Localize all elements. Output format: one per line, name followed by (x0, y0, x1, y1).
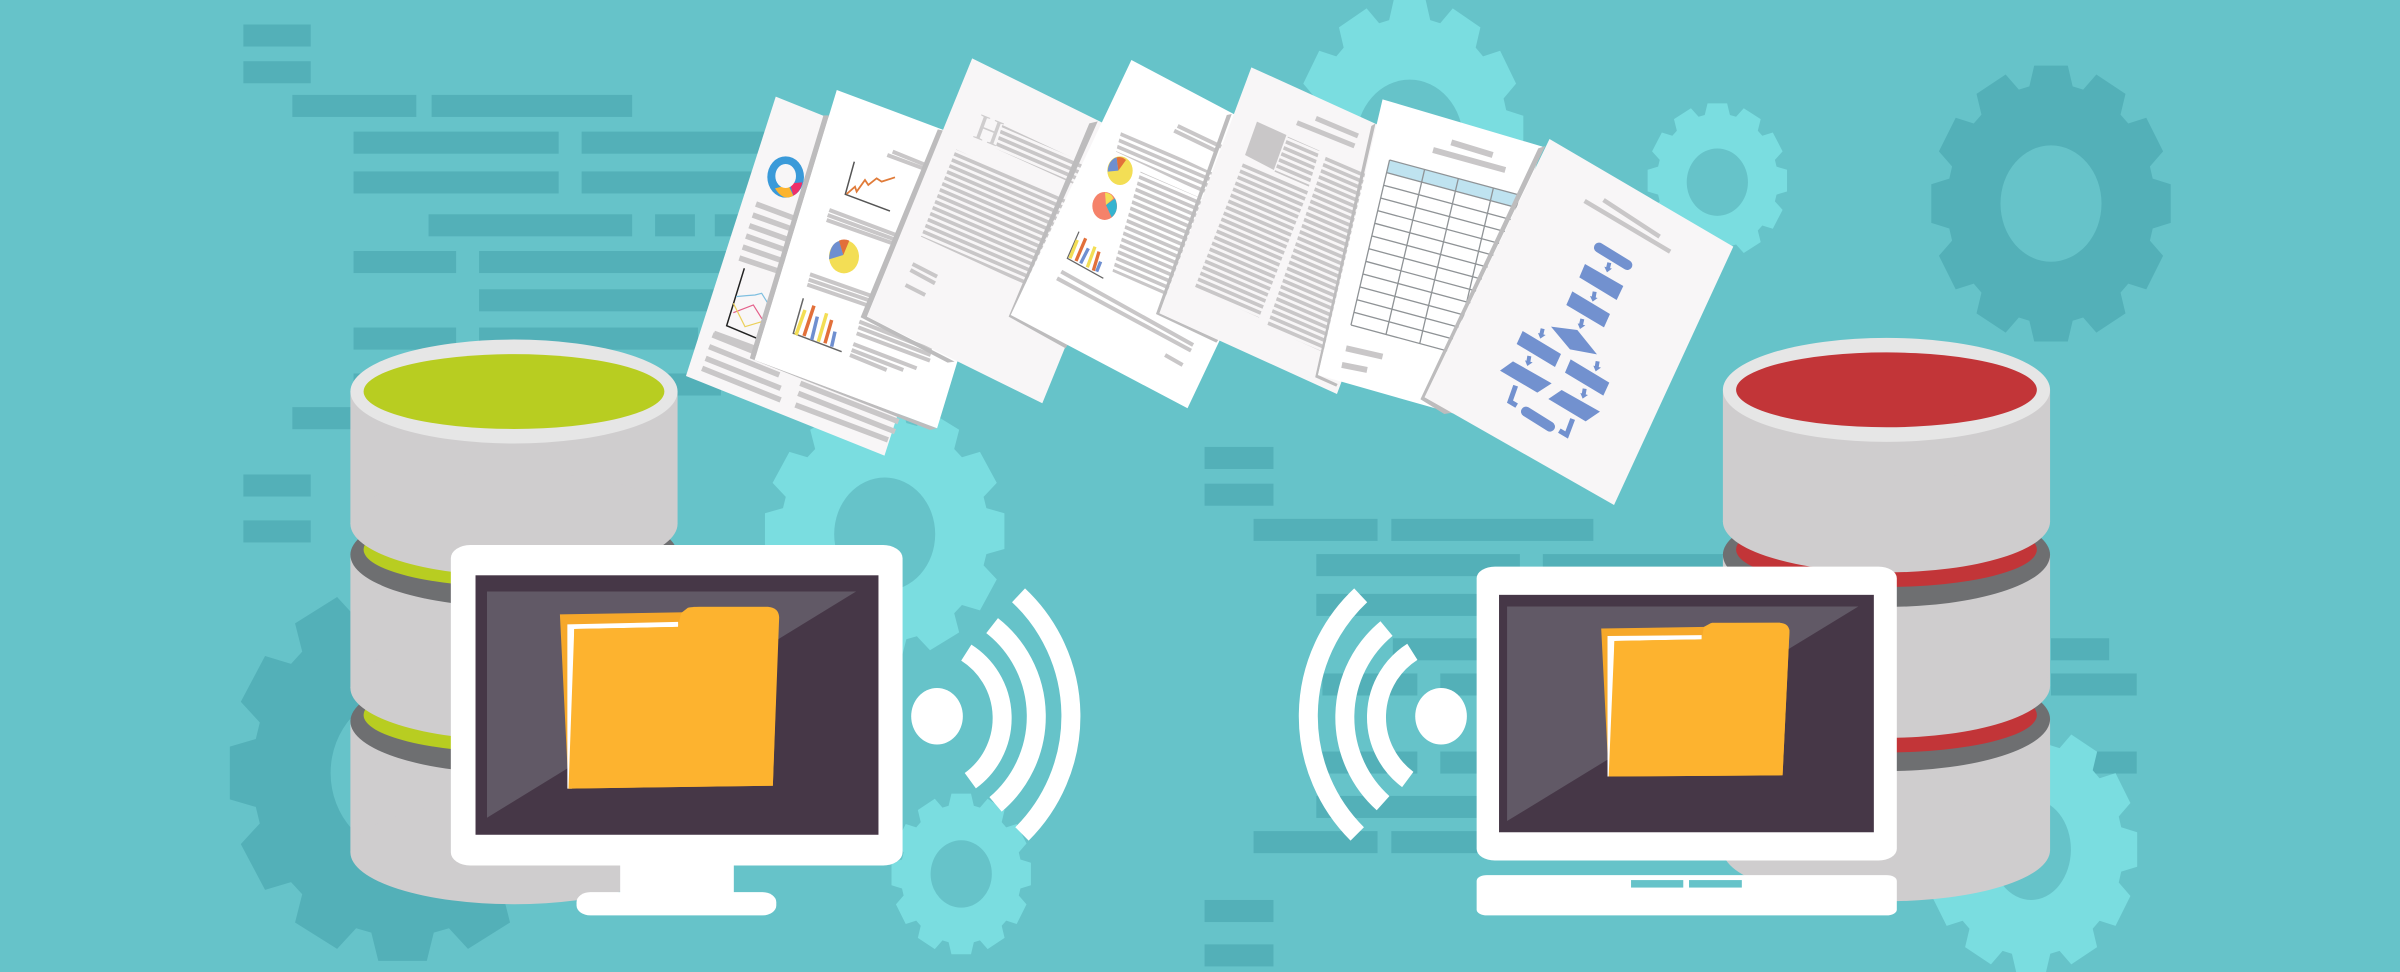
heading letter on page: H (969, 106, 1008, 154)
icon: wifi signal left (911, 595, 1071, 834)
background code bars (243, 24, 2137, 966)
gear: dark top right (1931, 66, 2171, 341)
gear: large dark left (230, 585, 575, 961)
desktop monitor (451, 545, 903, 915)
page 4: pie chart report (1009, 60, 1308, 408)
gear: small top (1648, 103, 1787, 258)
page 5: two column article (1156, 67, 1429, 394)
gear: top centre (1296, 0, 1523, 270)
laptop base (1477, 875, 1897, 915)
document stack (686, 58, 1733, 505)
monitor frame (451, 545, 903, 866)
monitor screen (476, 575, 878, 835)
gear: lower right (1925, 727, 2137, 972)
flowchart (1500, 248, 1627, 435)
gear: middle left (765, 404, 1004, 658)
left database cylinder (350, 340, 678, 904)
page 2: charts report (750, 90, 1019, 430)
laptop lid (1477, 567, 1897, 861)
gear: small lower (892, 794, 1031, 954)
monitor stand (577, 861, 776, 915)
page 3: text document (861, 58, 1148, 403)
icon: folder (1601, 623, 1789, 777)
laptop screen (1499, 595, 1874, 832)
page 7: flowchart document (1420, 139, 1733, 505)
icon: folder (560, 607, 779, 789)
page 1: donut and line chart report (686, 97, 974, 456)
page 6: table document (1315, 99, 1542, 413)
icon: wifi signal right (1308, 595, 1467, 834)
right database cylinder (1723, 338, 2050, 901)
laptop (1477, 567, 1897, 915)
